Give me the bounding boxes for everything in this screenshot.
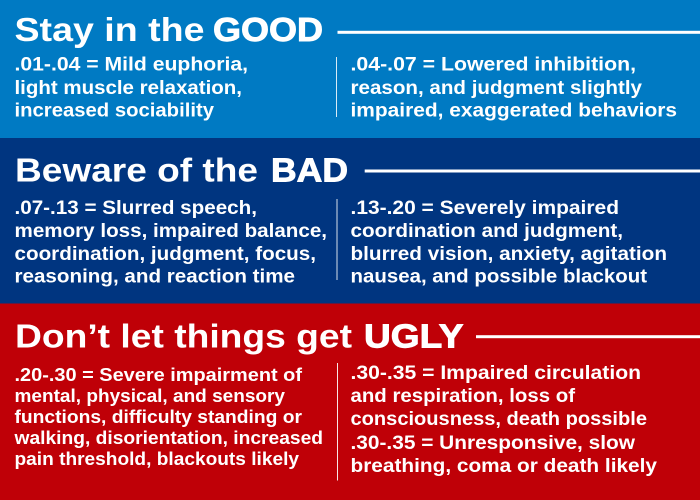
text block: .07-.13 <box>14 197 327 288</box>
heading: don't let things get ugly: UGLY <box>364 318 464 355</box>
text block: .01-.04: light muscle relaxation, <box>14 77 242 99</box>
text block: .30-.35 impaired circulation: .30-.35 = Impaired circulation <box>350 362 641 384</box>
text block: .07-.13: memory loss, impaired balance, <box>14 220 327 242</box>
text block: .13-.20: nausea, and possible blackout <box>350 266 648 288</box>
text block: .13-.20: blurred vision, anxiety, agitation <box>350 243 667 265</box>
text block: .04-.07: reason, and judgment slightly <box>350 77 642 99</box>
text block: .01-.04: .01-.04 = Mild euphoria, <box>14 54 248 76</box>
text block: .01-.04 <box>14 54 248 122</box>
text block: .04-.07 <box>350 54 677 122</box>
text block: .07-.13: coordination, judgment, focus, <box>14 243 316 265</box>
heading: beware of the bad <box>15 152 700 190</box>
text block: .13-.20: .13-.20 = Severely impaired <box>350 197 619 219</box>
heading: stay in the good: GOOD <box>213 11 323 48</box>
text block: .13-.20: coordination and judgment, <box>350 220 623 242</box>
text block: .20-.30: walking, disorientation, increased <box>13 427 323 448</box>
text block: .30-.35 unresponsive <box>350 432 657 477</box>
panel: ugly <box>0 304 700 500</box>
text block: .01-.04: increased sociability <box>14 100 214 122</box>
heading: stay in the good: Stay in the <box>14 12 204 49</box>
panel: good <box>0 0 700 138</box>
text block: .30-.35 impaired circulation: consciousness, death possible <box>350 408 647 430</box>
heading: don't let things get ugly: Don’t let things get <box>15 319 352 356</box>
text block: .30-.35 unresponsive: .30-.35 = Unresponsive, slow <box>350 432 636 454</box>
text block: .20-.30: .20-.30 = Severe impairment of <box>14 364 303 385</box>
heading: beware of the bad: BAD <box>271 152 348 189</box>
text block: .04-.07: .04-.07 = Lowered inhibition, <box>350 54 636 76</box>
text block: .07-.13: .07-.13 = Slurred speech, <box>14 197 257 219</box>
text block: .07-.13: reasoning, and reaction time <box>14 266 295 288</box>
text block: .13-.20 <box>350 197 667 288</box>
heading: beware of the bad: Beware of the <box>15 153 258 190</box>
text block: .20-.30: pain threshold, blackouts likely <box>14 448 300 469</box>
heading: don't let things get ugly <box>15 318 700 356</box>
text block: .30-.35 impaired circulation: and respiration, loss of <box>350 385 576 407</box>
text block: .04-.07: impaired, exaggerated behaviors <box>350 100 677 122</box>
panel: bad <box>0 138 700 304</box>
text block: .30-.35 unresponsive: breathing, coma or death likely <box>350 455 657 477</box>
text block: .20-.30 <box>13 364 323 469</box>
text block: .20-.30: functions, difficulty standing or <box>14 406 302 427</box>
text block: .20-.30: mental, physical, and sensory <box>14 385 286 406</box>
text block: .30-.35 impaired circulation <box>350 362 647 430</box>
heading: stay in the good <box>14 11 700 49</box>
